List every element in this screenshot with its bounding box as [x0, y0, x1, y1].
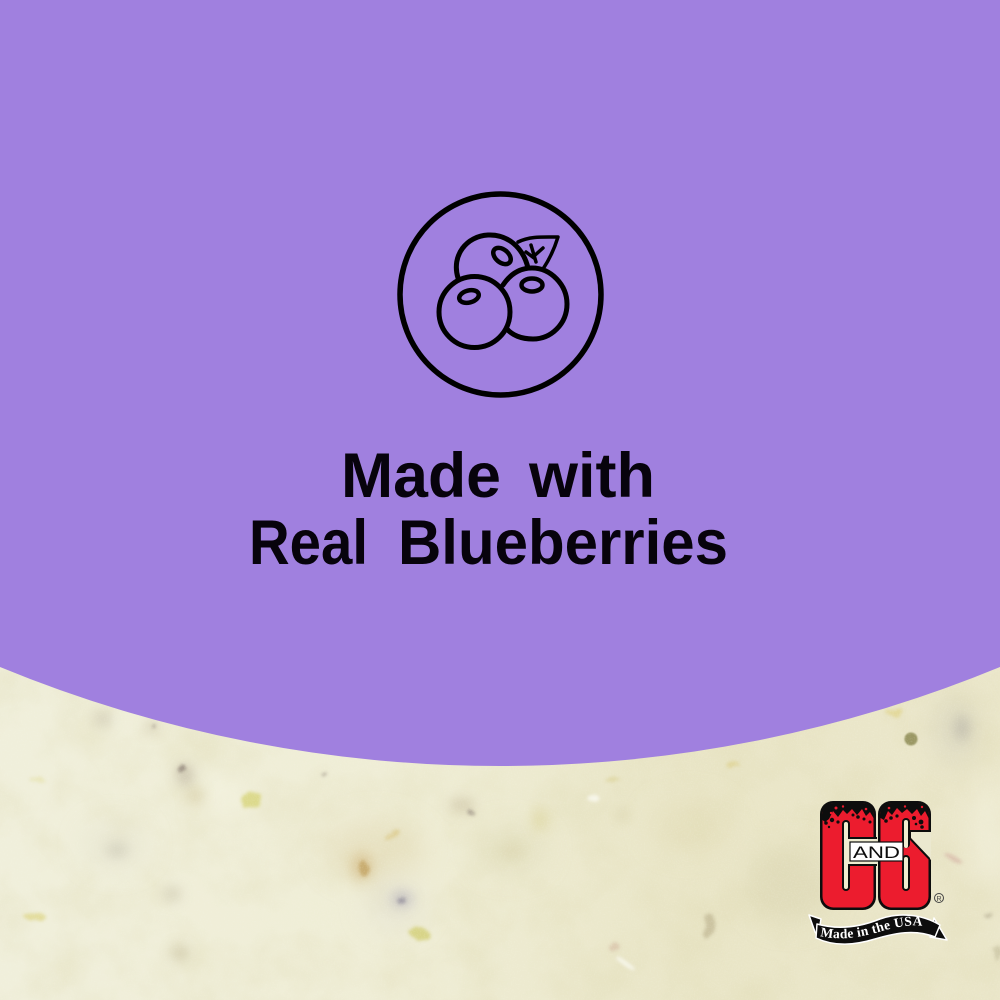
logo: ribbon — [808, 914, 948, 945]
icon: blueberries in circle — [400, 194, 601, 395]
background: cream oat texture — [0, 640, 1000, 1000]
title — [249, 441, 728, 578]
icon: front berry — [439, 276, 510, 348]
logo letter C — [820, 801, 877, 910]
logo: AND label: AND — [853, 843, 900, 862]
title word: Made: Made — [341, 441, 501, 511]
logo: registered mark: R — [936, 896, 942, 903]
title word: with: with — [528, 441, 655, 511]
logo: AND label — [850, 842, 903, 862]
logo letter S — [878, 801, 931, 910]
icon: back berry highlight — [490, 245, 514, 267]
title word: Blueberries: Blueberries — [398, 508, 728, 578]
logo: registered mark — [934, 894, 944, 903]
panel: purple curved header — [0, 0, 1000, 766]
icon: back berry — [456, 235, 528, 278]
icon: right berry highlight — [522, 278, 542, 292]
logo: ribbon: Made in the USA — [820, 916, 922, 938]
icon ring — [400, 194, 601, 395]
icon: front berry highlight — [458, 288, 480, 305]
icon: leaf — [518, 237, 558, 269]
title word: Real: Real — [249, 508, 368, 578]
logo: S charred top — [880, 804, 928, 829]
logo: C and S — [808, 801, 948, 945]
icon: right berry — [503, 268, 567, 339]
logo: C charred top — [822, 804, 874, 828]
